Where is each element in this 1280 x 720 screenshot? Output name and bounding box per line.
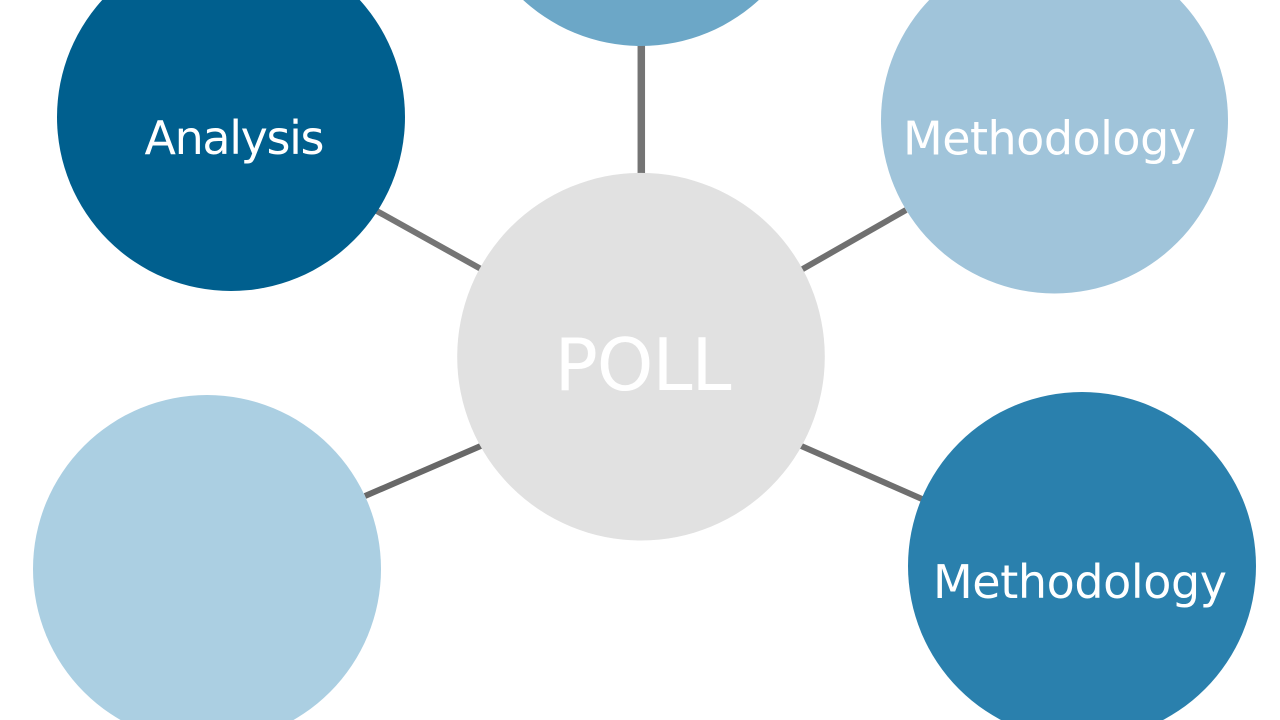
node: Methodology upper right: Methodology: [903, 112, 1196, 166]
node: Methodology upper right: [881, 0, 1228, 294]
node: Analysis: [57, 0, 405, 291]
connector: top: [638, 40, 645, 175]
top circle: [467, 0, 815, 46]
connector: lower right: [799, 445, 922, 499]
center node: POLL: [457, 173, 825, 540]
node: Analysis: Analysis: [144, 111, 324, 165]
center node: POLL: POLL: [554, 323, 732, 407]
connector: upper left: [375, 210, 481, 269]
node: empty lower left: [33, 395, 381, 720]
node: Methodology lower right: Methodology: [933, 555, 1227, 609]
connector: upper right: [801, 210, 906, 270]
connector: lower left: [365, 445, 483, 496]
node: Methodology lower right: [908, 392, 1256, 720]
